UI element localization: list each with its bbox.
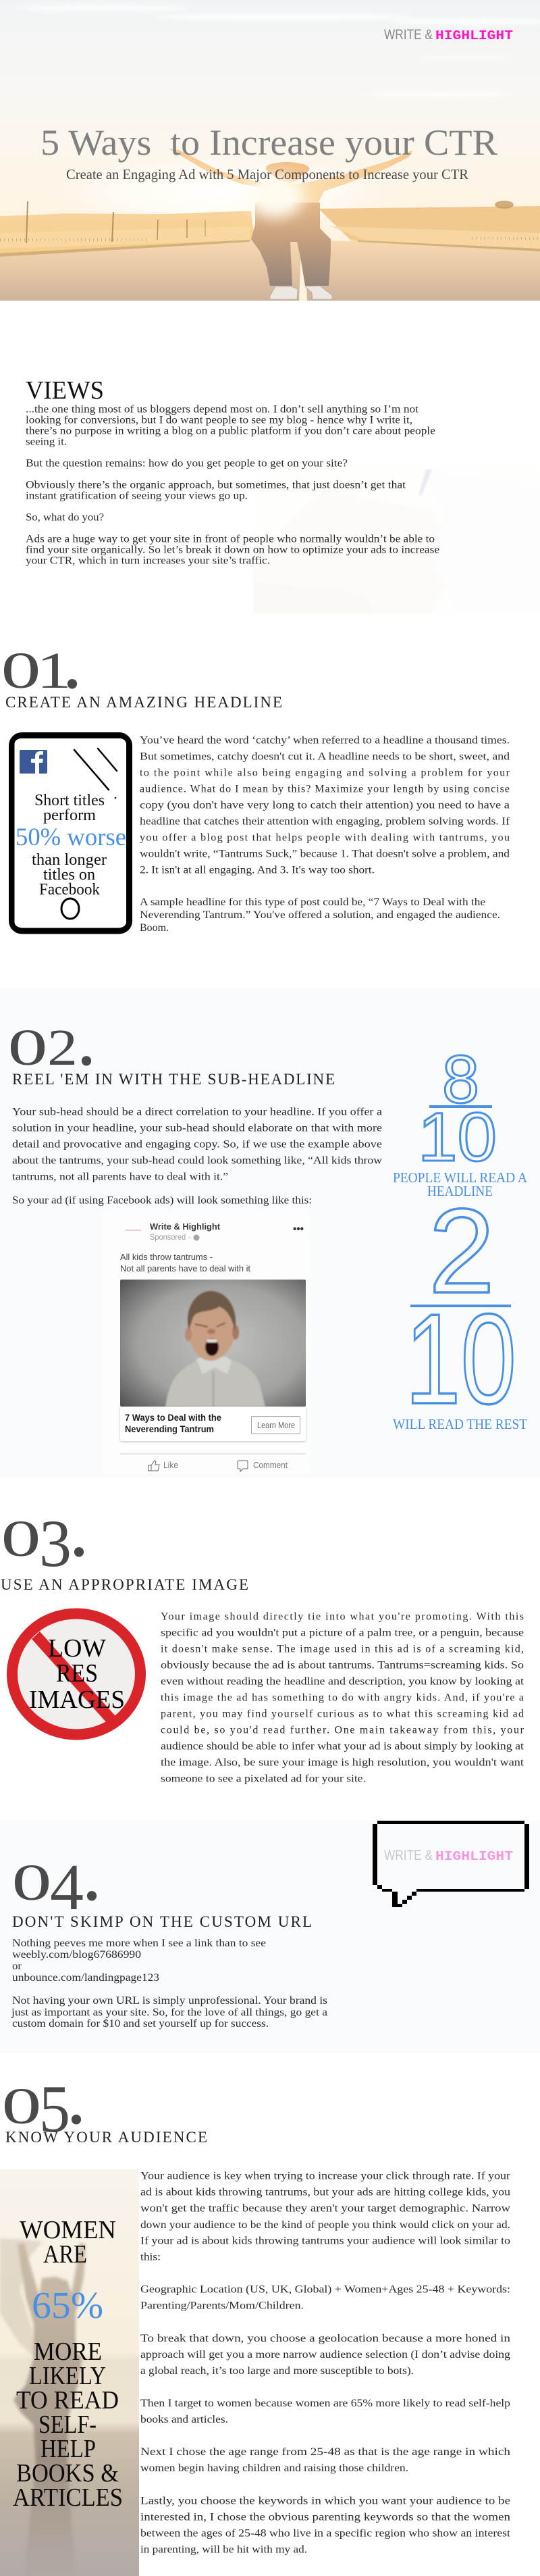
body text: someone to see a pixelated ad for your site.: [161, 1773, 366, 1784]
body text: Neverending Tantrum.” You've offered a solution, and engaged the audience.: [140, 909, 500, 921]
intro text: So, what do you?: [26, 512, 104, 524]
body text: [140, 2170, 511, 2556]
statistic text: 65%: [32, 2285, 103, 2327]
body text: Next I chose the age range from 25-48 as that is the age range in which: [140, 2446, 510, 2458]
body text: specific ad you wouldn't put a picture of a palm tree, or a penguin, because: [161, 1627, 524, 1638]
logo in bubble: HIGHLIGHT: [435, 1849, 513, 1864]
number 03: 3: [39, 1506, 72, 1581]
phone text: Facebook: [39, 881, 100, 899]
body text: solution in your headline, your sub-head should elaborate on that with more: [12, 1123, 382, 1134]
body text: weebly.com/blog67686990: [12, 1949, 141, 1961]
body text: between the ages of 25-48 who live in a specific region who show an interest: [140, 2528, 511, 2540]
number 02: .: [76, 992, 97, 1083]
body text: But sometimes, catchy doesn't cut it. A headline needs to be short, sweet, and: [140, 751, 510, 763]
like action: [148, 1460, 178, 1471]
ad link card: 7 Ways to Deal with the: [125, 1412, 221, 1423]
number 05: [1, 2050, 86, 2146]
intro text: ...the one thing most of us bloggers depend most on. I don’t sell anything so I’m not: [26, 404, 419, 415]
logo: Write & Highlight: WRITE &: [384, 27, 433, 43]
logo in bubble: WRITE &: [384, 1848, 433, 1863]
body text: just as important as your site. So, for the love of all things, go get a: [11, 2006, 327, 2018]
ad copy: [120, 1252, 250, 1273]
body text: in parenting, will be hit with my ad.: [140, 2544, 307, 2556]
body text: You’ve heard the word ‘catchy’ when referred to a headline a thousand times.: [140, 735, 510, 747]
intro text: [26, 404, 439, 567]
icon: facebook: [20, 750, 47, 774]
body text: books and articles.: [140, 2414, 228, 2425]
phone glare strokes: [74, 749, 117, 790]
body text: [12, 1107, 382, 1207]
like action: Like: [163, 1460, 178, 1470]
phone text: perform: [43, 807, 96, 824]
body text: this image the ad has something to do with angry kids. And, if you're a: [161, 1692, 524, 1703]
home button: [61, 899, 79, 919]
body text: headline that catches their attention with engaging, problem solving words. If: [140, 816, 510, 828]
ad link card: Neverending Tantrum: [125, 1423, 214, 1434]
phone graphic: [12, 735, 130, 931]
statistic text: LIKELY: [29, 2362, 106, 2390]
intro text: your CTR, which in turn increases your site’s traffic.: [26, 555, 270, 567]
number 03: .: [69, 1483, 89, 1574]
ad copy: Not all parents have to deal with it: [120, 1263, 250, 1273]
number 02: 0: [8, 1019, 47, 1076]
phone text: than longer: [32, 851, 107, 869]
intro text: looking for conversions, but I do want people to see my blog - hence why I write it,: [26, 415, 412, 426]
number 04: 4: [50, 1851, 84, 1923]
body text: down your audience to be the kind of people you think would click on your ad.: [140, 2219, 510, 2231]
body text: Your image should directly tie into what you're promoting. With this: [161, 1611, 524, 1622]
body text: audience should be able to infer what your ad is about simply by looking at: [161, 1740, 524, 1752]
number 04: 0: [12, 1854, 51, 1911]
ad copy: All kids throw tantrums -: [120, 1252, 213, 1262]
advertiser name: Write & Highlight: [150, 1221, 221, 1232]
body text: tantrums, not all parents have to deal with it.”: [12, 1171, 228, 1183]
heading: CREATE AN AMAZING HEADLINE: [5, 694, 282, 711]
stat: 8 of 10: 8: [442, 1042, 479, 1117]
learn more button: Learn More: [257, 1420, 295, 1430]
body text: this:: [140, 2252, 161, 2263]
body text: audience. What do I mean by this? Maximize your length by using concise: [140, 784, 510, 795]
panel: section 02: [0, 988, 540, 1478]
body text: Your audience is key when trying to increase your click through rate. If your: [140, 2170, 511, 2181]
body text: approach will get you a more narrow audience selection (I don’t advise doing: [140, 2349, 510, 2360]
statistic text: SELF-: [38, 2410, 97, 2439]
intro text: seeing it.: [26, 436, 67, 448]
number 03: [1, 1483, 89, 1581]
body text: it doesn't make sense. The image used in this ad is of a screaming kid,: [161, 1643, 524, 1655]
stat: 8 of 10: 10: [418, 1098, 497, 1176]
body text: the image. Also, be sure your image is high resolution, you wouldn't want: [161, 1757, 524, 1768]
panel: section 04: [0, 1821, 540, 2053]
number 05: .: [66, 2050, 86, 2142]
more dots: •••: [293, 1223, 304, 1235]
body text: Lastly, you choose the keywords in which you want your audience to be: [140, 2495, 510, 2506]
statistic text: WOMEN: [20, 2216, 116, 2244]
body text: copy (you don't have very long to catch their attention) you need to have a: [140, 800, 510, 811]
no low res images sign: RES: [56, 1659, 98, 1688]
body text: [140, 735, 510, 934]
number 01: .: [62, 615, 82, 706]
subtitle: Create an Engaging Ad with 5 Major Components to Increase your CTR: [66, 166, 468, 182]
body text: unbounce.com/landingpage123: [12, 1972, 159, 1984]
number 05: 5: [39, 2071, 70, 2146]
number 04: .: [82, 1827, 102, 1918]
panel: section 01: [1, 615, 510, 934]
phone text: 50% worse: [16, 824, 126, 851]
phone text: [16, 792, 126, 899]
body text: [161, 1611, 524, 1784]
number 04: [12, 1827, 102, 1923]
figure silhouette: [169, 149, 413, 286]
panel: section 05: [0, 2050, 511, 2576]
body text: custom domain for $10 and set yourself up for success.: [12, 2018, 269, 2029]
ad photo: screaming boy: [120, 1280, 306, 1407]
stat label: [393, 1169, 528, 1199]
comment action: Comment: [253, 1460, 288, 1470]
logo in bubble: [384, 1848, 513, 1864]
number 03: 0: [1, 1511, 40, 1567]
body text: To break that down, you choose a geolocation because a more honed in: [140, 2333, 510, 2344]
statistic text: HELP: [40, 2435, 96, 2463]
body text: women begin having children and raising those children.: [140, 2463, 408, 2474]
body text: Parenting/Parents/Mom/Children.: [140, 2300, 304, 2312]
body text: won't get the traffic because they aren't your target demographic. Narrow: [140, 2203, 511, 2215]
panel: section 03: [1, 1483, 524, 1784]
body text: Not having your own URL is simply unprofessional. Your brand is: [12, 1995, 327, 2006]
number 01: [1, 615, 82, 706]
logo: Write & Highlight: HIGHLIGHT: [435, 28, 513, 43]
heading: REEL 'EM IN WITH THE SUB-HEADLINE: [12, 1071, 335, 1088]
ad link card: [120, 1407, 306, 1441]
phone text: Short titles: [34, 792, 105, 809]
stat: 8 of 10: [393, 1042, 528, 1199]
intro text: instant gratification of seeing your views go up.: [26, 490, 248, 502]
intro text: Obviously there’s the organic approach, but sometimes, that just doesn’t get that: [26, 480, 406, 491]
intro text: find your site organically. So let’s break it down on how to optimize your ads to increase: [26, 545, 439, 556]
body text: [11, 1938, 327, 2029]
ad logo mark: [126, 1230, 141, 1231]
heading: USE AN APPROPRIATE IMAGE: [1, 1576, 248, 1593]
statistic text: TO READ: [16, 2386, 119, 2415]
no low res images sign: LOW: [48, 1634, 106, 1663]
statistic text: MORE: [34, 2338, 102, 2366]
body text: to the point while also being engaging and solving a problem for your: [140, 767, 510, 779]
panel: hero: [0, 0, 540, 301]
body text: 2. It isn't at all engaging. And 3. It's way too short.: [140, 865, 375, 876]
intro text: Ads are a huge way to get your site in front of people who normally wouldn’t be able to: [26, 534, 435, 545]
comment action: [238, 1460, 288, 1471]
body text: Boom.: [140, 922, 169, 934]
intro text: there’s no purpose in writing a blog on a public platform if you don’t care about people: [26, 426, 435, 437]
stat label: HEADLINE: [427, 1183, 493, 1199]
body text: a global reach, it’s too large and more susceptible to bots).: [140, 2365, 414, 2377]
body text: interested in, I chose the obvious parenting keywords so that the women: [140, 2511, 510, 2523]
intro text: But the question remains: how do you get people to get on your site?: [26, 458, 348, 470]
body text: could be, so you'd read further. One main takeaway from this, your: [161, 1724, 524, 1736]
number 01: 0: [1, 642, 40, 699]
heading: DON'T SKIMP ON THE CUSTOM URL: [12, 1913, 312, 1930]
body text: wouldn't write, “Tantrums Suck,” because 1. That doesn't solve a problem, and: [140, 849, 510, 860]
body text: Your sub-head should be a direct correlation to your headline. If you offer a: [12, 1107, 382, 1118]
body text: obviously because the ad is about tantrums. Tantrums=screaming kids. So: [161, 1659, 524, 1671]
no low res images sign: IMAGES: [29, 1686, 125, 1714]
hero photo: person on road at sunrise: [0, 0, 540, 301]
body text: even without reading the headline and description, you know by looking at: [161, 1675, 524, 1687]
stat: 2 of 10: 2: [429, 1184, 495, 1318]
body text: ad is about kids throwing tantrums, but your ads are hitting college kids, you: [140, 2186, 510, 2198]
body text: Nothing peeves me more when I see a link than to see: [12, 1938, 266, 1949]
pixel speech bubble: [373, 1821, 529, 1907]
body text: Geographic Location (US, UK, Global) + Women+Ages 25-48 + Keywords:: [140, 2283, 510, 2295]
body text: Then I target to women because women are 65% more likely to read self-help: [140, 2398, 510, 2409]
stat: 2 of 10: [393, 1184, 527, 1432]
number 01: 1: [36, 642, 72, 699]
phone text: titles on: [43, 866, 95, 884]
body text: detail and provocative and engaging copy. So, if we use the example above: [12, 1139, 382, 1151]
learn more button: [251, 1416, 300, 1434]
panel: intro: [26, 376, 540, 613]
body text: about the tantrums, your sub-head could look something like, “All kids throw: [12, 1155, 382, 1167]
stat label: WILL READ THE REST: [393, 1416, 527, 1432]
photo panel with statistic: [0, 2169, 139, 2576]
woman silhouette: [0, 2238, 86, 2576]
body text: If your ad is about kids throwing tantrums your audience will look similar to: [140, 2235, 510, 2247]
heading: KNOW YOUR AUDIENCE: [5, 2129, 207, 2146]
shoes: [270, 286, 332, 299]
statistic text: [13, 2216, 123, 2512]
number 02: 2: [47, 1019, 78, 1076]
body text: you offer a blog post that helps people with dealing with tantrums, you: [140, 832, 510, 844]
number 02: [8, 992, 97, 1083]
sponsored label: Sponsored ·: [150, 1232, 190, 1242]
number 05: 0: [1, 2078, 42, 2135]
logo: Write & Highlight: [384, 27, 513, 43]
heading: views: VIEWS: [26, 376, 104, 405]
body text: A sample headline for this type of post could be, “7 Ways to Deal with the: [140, 896, 485, 908]
no low res images sign: [12, 1613, 140, 1735]
background: faint books photo: [253, 468, 540, 613]
body text: or: [12, 1961, 22, 1972]
stat label: PEOPLE WILL READ A: [393, 1169, 528, 1186]
facebook ad mockup: [103, 1209, 310, 1474]
statistic text: ARTICLES: [13, 2483, 123, 2512]
body text: parent, you may find yourself curious as to what this screaming kid ad: [161, 1708, 524, 1719]
body text: So your ad (if using Facebook ads) will look something like this:: [12, 1195, 312, 1207]
statistic text: ARE: [43, 2240, 87, 2269]
statistic text: BOOKS &: [16, 2459, 119, 2487]
title: 5 Ways to Increase your CTR: [40, 122, 497, 163]
